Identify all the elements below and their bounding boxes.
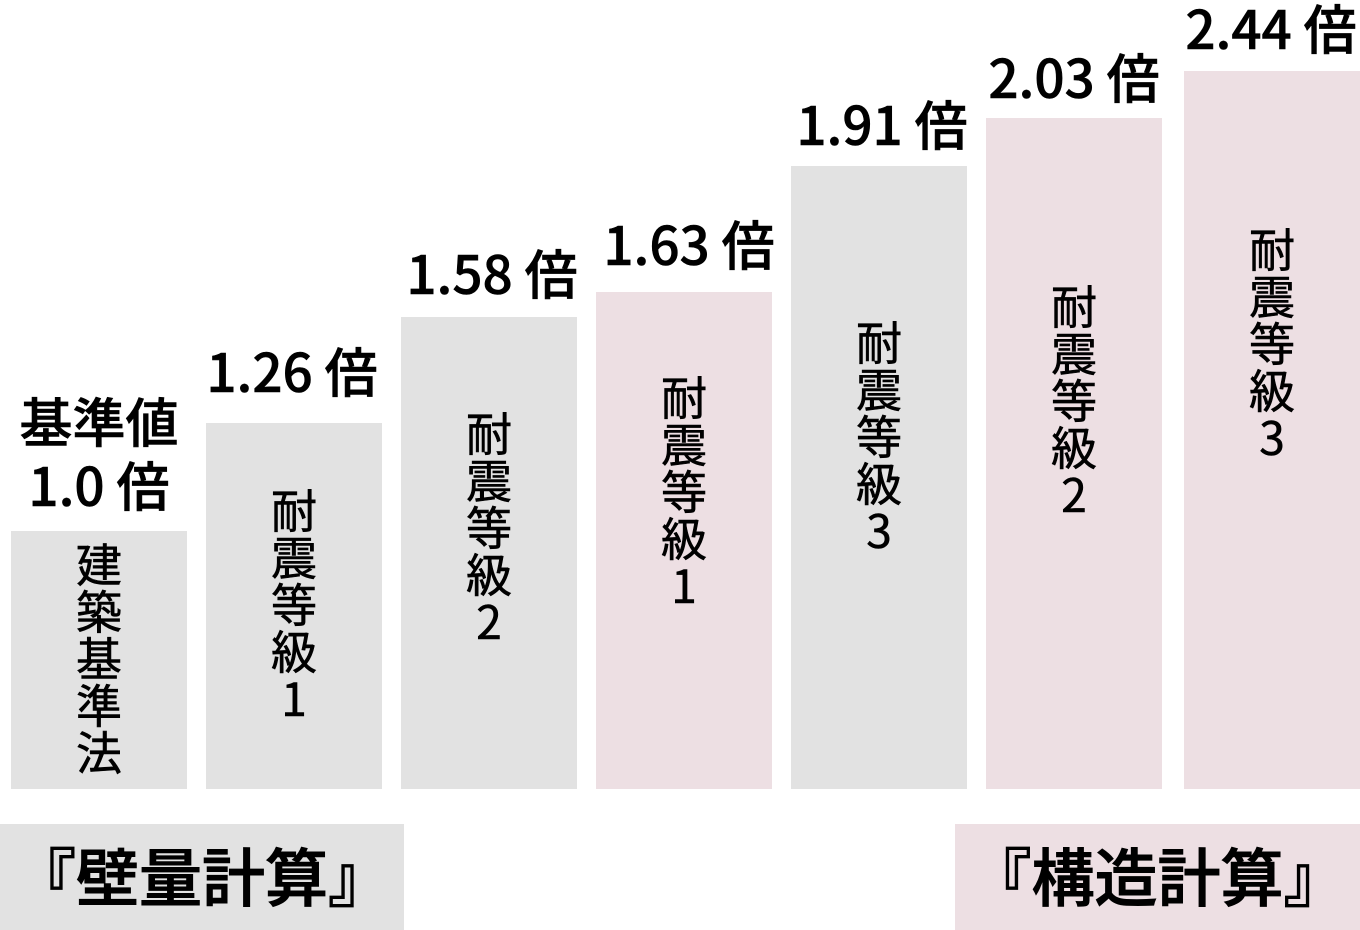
bar: wall grade 1: [206, 423, 382, 789]
bar text: wall grade 3: 級: [856, 449, 902, 515]
bar: wall grade 2: [401, 317, 577, 789]
panel: column 4 structural grade 1: [596, 205, 775, 789]
bar text: building standard law: 建: [76, 530, 122, 596]
bar text: wall grade 3: 耐: [856, 308, 902, 374]
value label: 1.26x: 1.26 倍: [206, 332, 378, 408]
bar text: structural grade 3: [1249, 215, 1295, 469]
panel: column 5 wall grade 3: [791, 85, 968, 789]
panel: column 2 wall grade 1: [206, 332, 382, 789]
bar text: wall grade 3: 等: [856, 402, 902, 468]
value label: baseline 1.0x: 1.0 倍: [28, 446, 170, 522]
category label: wall quantity calculation: 『壁量計算』: [13, 829, 391, 920]
bar text: building standard law: 基: [76, 624, 122, 690]
bar text: structural grade 2: 震: [1051, 319, 1097, 385]
value label: 1.58x: 1.58 倍: [406, 234, 578, 310]
bar text: wall grade 2: 震: [466, 446, 512, 512]
bar text: structural grade 2: 耐: [1051, 272, 1097, 338]
bar text: structural grade 1: 1: [671, 551, 697, 617]
bar text: structural grade 1: 級: [661, 504, 707, 570]
bar text: wall grade 3: 震: [856, 355, 902, 421]
bar text: building standard law: 築: [76, 577, 122, 643]
bar text: structural grade 1: [661, 363, 707, 617]
bar text: structural grade 3: 震: [1249, 262, 1295, 328]
panel: column 7 structural grade 3: [1184, 0, 1360, 789]
bar text: structural grade 1: 等: [661, 457, 707, 523]
bar text: structural grade 3: 3: [1259, 403, 1285, 469]
bar text: building standard law: 準: [76, 671, 122, 737]
bar text: wall grade 1: [271, 476, 317, 730]
bar text: wall grade 1: 級: [271, 617, 317, 683]
bar: wall grade 3: [791, 166, 967, 789]
value label: 2.03x: 2.03 倍: [988, 38, 1160, 114]
panel: column 1 baseline: [11, 382, 187, 789]
bar text: structural grade 3: 等: [1249, 309, 1295, 375]
bar: building standard law: [11, 531, 187, 789]
bar text: structural grade 2: 等: [1051, 366, 1097, 432]
bar text: wall grade 2: 級: [466, 540, 512, 606]
category label: structural calculation: 『構造計算』: [968, 829, 1346, 920]
bar text: structural grade 2: 2: [1061, 460, 1087, 526]
bar text: building standard law: [76, 530, 122, 784]
bar text: wall grade 2: 等: [466, 493, 512, 559]
bar text: structural grade 2: [1051, 272, 1097, 526]
bar text: structural grade 3: 級: [1249, 356, 1295, 422]
bar text: structural grade 1: 耐: [661, 363, 707, 429]
bar text: structural grade 3: 耐: [1249, 215, 1295, 281]
panel: column 3 wall grade 2: [401, 234, 578, 789]
bar text: structural grade 2: 級: [1051, 413, 1097, 479]
value label: baseline 1.0x: [20, 382, 178, 522]
bar: structural grade 3: [1184, 71, 1360, 789]
value label: baseline 1.0x: 基準値: [20, 382, 178, 458]
value label: 1.63x: 1.63 倍: [603, 205, 775, 281]
bar: structural grade 2: [986, 118, 1162, 789]
bar text: wall grade 2: 耐: [466, 399, 512, 465]
bar text: structural grade 1: 震: [661, 410, 707, 476]
bar text: wall grade 1: 等: [271, 570, 317, 636]
bar text: wall grade 2: 2: [476, 587, 502, 653]
bar text: building standard law: 法: [76, 718, 122, 784]
bar text: wall grade 1: 震: [271, 523, 317, 589]
bar text: wall grade 1: 耐: [271, 476, 317, 542]
value label: 1.91x: 1.91 倍: [796, 85, 968, 161]
panel: column 6 structural grade 2: [986, 38, 1162, 789]
bar text: wall grade 3: 3: [866, 496, 892, 562]
bar text: wall grade 3: [856, 308, 902, 562]
bar text: wall grade 2: [466, 399, 512, 653]
bar: structural grade 1: [596, 292, 772, 789]
bar text: wall grade 1: 1: [281, 664, 307, 730]
